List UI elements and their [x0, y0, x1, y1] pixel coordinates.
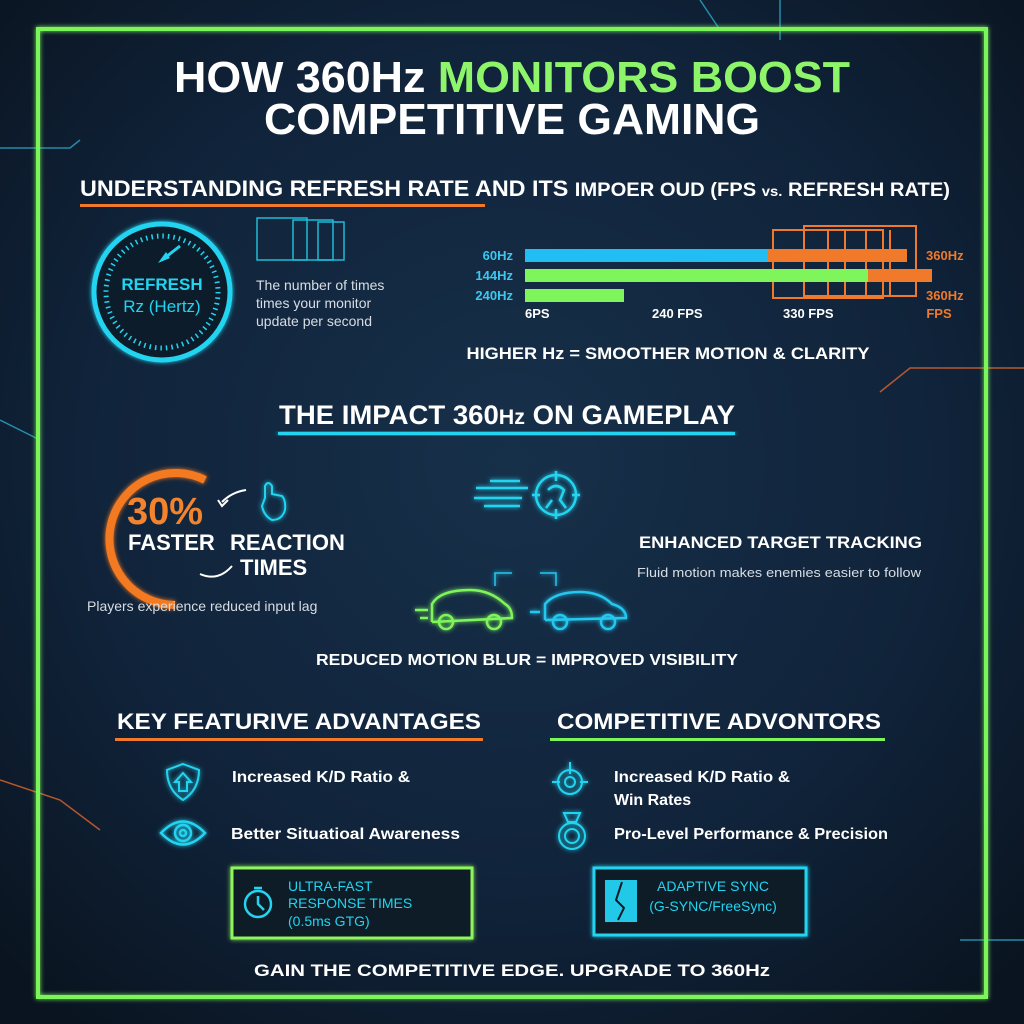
box: adaptive sync: (G-SYNC/FreeSync) [649, 898, 777, 914]
title: COMPETITIVE GAMING [264, 95, 760, 144]
text: enhanced target tracking: Fluid motion makes enemies easier to follow [637, 565, 922, 580]
icon: refresh gauge: Rz (Hertz) [123, 297, 201, 316]
list: competitive [552, 762, 888, 849]
stat: 30% faster reaction: 30% [127, 491, 203, 533]
text: enhanced target tracking [637, 533, 922, 580]
box: adaptive sync [594, 868, 806, 935]
footer call to action: GAIN THE COMPETITIVE EDGE. UPGRADE TO 360Hz [254, 961, 770, 980]
heading: understanding refresh rate: UNDERSTANDING REFRESH RATE AND ITS IMPOER OUD (FPS vs. REFRESH RATE) [80, 176, 950, 201]
stat: 30% faster reaction: TIMES [240, 555, 307, 580]
icon: hand tap [262, 483, 285, 520]
bar chart: fps vs refresh [475, 226, 964, 321]
icon: eye [161, 822, 205, 844]
list: competitive: Increased K/D Ratio & [614, 769, 790, 786]
box: ultra-fast response: (0.5ms GTG) [288, 913, 370, 929]
icon: refresh gauge [94, 224, 230, 360]
box: ultra-fast response: RESPONSE TIMES [288, 895, 412, 911]
bar chart: fps vs refresh: 240 FPS [652, 306, 703, 321]
icon: target tracking [474, 471, 580, 519]
bar chart: fps vs refresh: 60Hz [483, 248, 513, 263]
text: refresh definition: times your monitor [256, 295, 371, 311]
list: key features: Better Situatioal Awareness [231, 826, 460, 843]
list: competitive: Win Rates [614, 792, 691, 809]
title: HOW 360Hz MONITORS BOOST [174, 53, 850, 102]
text: reduced motion blur: REDUCED MOTION BLUR = IMPROVED VISIBILITY [316, 652, 738, 669]
icon: medal [559, 813, 585, 849]
list: competitive: Pro-Level Performance & Precision [614, 826, 888, 843]
text: higher hz: HIGHER Hz = SMOOTHER MOTION & CLARITY [466, 344, 870, 363]
bar chart: fps vs refresh: 240Hz [475, 288, 514, 303]
bar chart: fps vs refresh: 330 FPS [783, 306, 834, 321]
title [174, 53, 850, 144]
text: refresh definition [256, 277, 384, 329]
box: ultra-fast response [232, 868, 472, 938]
box: ultra-fast response: ULTRA-FAST [288, 878, 373, 894]
bar chart: fps vs refresh: 6PS [525, 306, 550, 321]
icon: cars [415, 573, 626, 629]
heading: key features: KEY FEATURIVE ADVANTAGES [117, 709, 481, 734]
icon: frames [257, 218, 344, 260]
stat: 30% faster reaction [109, 473, 345, 605]
bar chart: fps vs refresh: 360Hz [926, 248, 964, 263]
list: key features: Increased K/D Ratio & [232, 769, 410, 786]
stat: 30% faster reaction: FASTER [128, 530, 215, 555]
list: key features [161, 764, 460, 844]
text: refresh definition: update per second [256, 313, 372, 329]
text: enhanced target tracking: ENHANCED TARGET TRACKING [639, 533, 922, 552]
heading: impact: THE IMPACT 360Hz ON GAMEPLAY [279, 400, 735, 430]
icon: shield [167, 764, 199, 800]
bar chart: fps vs refresh: 144Hz [475, 268, 514, 283]
icon: refresh gauge: REFRESH [121, 275, 203, 294]
icon: target [552, 762, 588, 794]
heading: competitive advantages: COMPETITIVE ADVONTORS [557, 709, 881, 734]
stat: 30% faster reaction: REACTION [230, 530, 345, 555]
text: refresh definition: The number of times [256, 277, 384, 293]
bar chart: fps vs refresh: 360Hz [926, 288, 964, 303]
heading: competitive advantages [550, 709, 885, 741]
text: Players experience reduced input lag [87, 598, 317, 614]
box: adaptive sync: ADAPTIVE SYNC [657, 878, 769, 894]
bar chart: fps vs refresh: FPS [926, 306, 952, 321]
